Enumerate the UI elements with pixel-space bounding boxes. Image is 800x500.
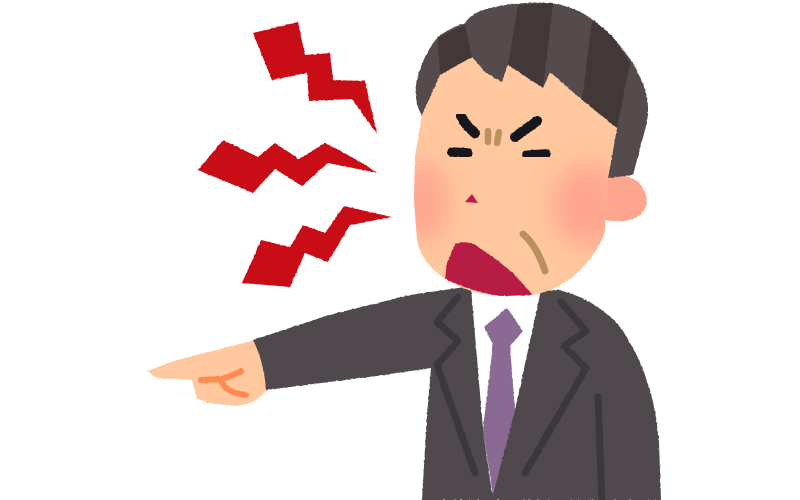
hand [147,340,268,406]
cheek line [523,234,545,271]
lightning bolt: middle [198,140,378,193]
face [414,57,617,296]
finger lines [201,371,246,395]
lightning bolt: bottom [242,206,392,287]
mouth [445,242,533,296]
cheek blush [396,163,624,247]
hair stripes [438,25,472,75]
lightning bolt: top [253,22,377,134]
ear [604,175,647,221]
shirt [471,288,541,493]
hair [416,3,648,178]
jacket [253,287,661,500]
eyebrows and eyes [452,116,546,155]
illustration: angry businessman pointing [147,2,661,500]
pocket line [598,397,602,500]
nose [465,194,478,203]
necktie [483,308,523,495]
lapel lines [437,297,602,500]
frown lines [488,131,499,143]
